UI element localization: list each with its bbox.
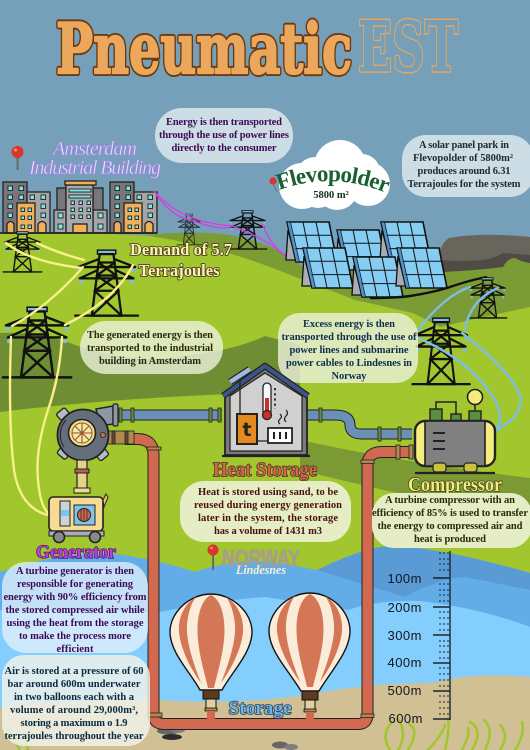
energy callout bubble: directly to the consumer (172, 143, 277, 154)
turbine (56, 404, 118, 493)
heading: Amsterdam Industrial Building: Industrial Building (28, 157, 161, 179)
heading: demand of 5.7 terrajoules: Terrajoules (138, 261, 220, 280)
power tower: right small (468, 278, 507, 318)
compressor callout bubble: A turbine compressor with an (385, 495, 515, 506)
title: Pneumatic (56, 9, 352, 90)
generator callout bubble: using the heat from the storage (6, 618, 144, 629)
power tower: right large (412, 318, 470, 384)
excess energy callout bubble: Excess energy is then (303, 319, 395, 330)
compressor callout bubble: heat is produced (414, 534, 486, 545)
depth scale: 500m (387, 683, 422, 698)
generator machine (49, 494, 108, 542)
pin: Amsterdam (12, 146, 24, 170)
yellow power lines (6, 243, 133, 515)
generated energy callout bubble: The generated energy is then (87, 330, 213, 341)
power tower: left near (3, 307, 71, 377)
solar park callout bubble: Flevopolder of 5800m² (413, 153, 513, 164)
excess energy callout bubble: transported through the use of (282, 332, 417, 343)
balloon right (269, 593, 350, 720)
depth scale (387, 551, 450, 726)
heading: demand of 5.7 terrajoules (130, 240, 232, 280)
solar panels back row (286, 222, 431, 270)
compressor callout bubble (372, 493, 530, 548)
depth scale: 600m (388, 711, 423, 726)
heading: storage: Storage (228, 698, 292, 719)
excess energy callout bubble: power lines and submarine (290, 345, 409, 356)
heat storage callout bubble: later in the system, the storage (198, 513, 338, 524)
heading: Amsterdam Industrial Building: Amsterdam (51, 138, 137, 160)
seaweed (8, 718, 523, 750)
generator callout bubble (2, 562, 148, 655)
cloud label: Flevopolder: Flevopolder (275, 167, 390, 192)
purple power lines (154, 191, 288, 258)
generator callout bubble: to make the process more (19, 631, 131, 642)
air storage callout bubble: in two balloons each with a (14, 692, 135, 703)
excess energy callout bubble: Norway (332, 371, 367, 382)
grey mountain (436, 235, 530, 285)
generator callout bubble: A turbine generator is then (16, 566, 134, 577)
building: left tower (3, 182, 50, 233)
title: Pneumatic (56, 9, 352, 90)
building: centre block (54, 181, 107, 233)
depth scale: 300m (387, 628, 422, 643)
air storage callout bubble (2, 655, 150, 746)
solar park callout bubble: A solar panel park in (419, 140, 509, 151)
solar park callout bubble: produces around 6.31 (418, 166, 510, 177)
depth scale: 400m (387, 655, 422, 670)
depth scale: 100m (387, 571, 422, 586)
generated energy callout bubble (80, 321, 223, 374)
air storage callout bubble: volume of around 29,000m³, (10, 705, 138, 716)
heading: Norway Lindesnes (222, 545, 300, 577)
heading: Norway Lindesnes: NORWAY (222, 545, 300, 571)
generator callout bubble: energy with 90% efficiency from (4, 592, 147, 603)
generated energy callout bubble: building in Amsterdam (99, 356, 201, 367)
heat storage house: t (242, 419, 252, 441)
excess energy callout bubble: power cables to Lindesnes in (286, 358, 412, 369)
building: right tower (110, 182, 157, 233)
heading: heat storage: Heat Storage (213, 460, 317, 481)
generator callout bubble: the stored compressed air while (6, 605, 145, 616)
title: EST (358, 7, 458, 88)
compressor callout bubble: the energy to compressed air and (378, 521, 523, 532)
stones (157, 727, 298, 750)
air storage callout bubble: Air is stored at a pressure of 60 (4, 666, 144, 677)
heading: generator: Generator (36, 543, 116, 563)
generated energy callout bubble: transported to the industrial (87, 343, 213, 354)
power tower: back right (228, 211, 267, 249)
sea water layers (0, 546, 530, 750)
blue power lines (417, 287, 521, 431)
solar panels front row (302, 248, 447, 297)
balloon left (170, 594, 252, 720)
energy callout bubble: Energy is then transported (166, 117, 282, 128)
cloud label: Flevopolder (275, 140, 390, 210)
heat storage callout bubble (180, 481, 351, 542)
heat storage callout bubble: Heat is stored using sand, to be (198, 487, 338, 498)
compressor machine (415, 390, 495, 473)
heat storage callout bubble: has a volume of 1431 m3 (214, 526, 322, 537)
power tower: left far (3, 232, 42, 272)
generator callout bubble: efficient (56, 644, 94, 655)
heat storage callout bubble: reused during energy generation (194, 500, 342, 511)
pin: Flevopolder (269, 177, 277, 192)
heading: Norway Lindesnes: Lindesnes (235, 562, 286, 577)
solar park callout bubble: Terrajoules for the system (408, 179, 521, 190)
depth scale: 200m (387, 600, 422, 615)
compressor callout bubble: efficiency of 85% is used to transfer (372, 508, 528, 519)
green hills (0, 232, 530, 600)
blue pipe system (118, 408, 412, 441)
red pipe system (108, 431, 413, 724)
title: EST (358, 7, 458, 88)
heading: Amsterdam Industrial Building (28, 138, 161, 179)
air storage callout bubble: bar around 600m underwater (8, 679, 141, 690)
heat storage house (222, 366, 310, 456)
heading: compressor: Compressor (408, 475, 502, 496)
air storage callout bubble: storing a maximum o 1.9 (20, 718, 128, 729)
heading: demand of 5.7 terrajoules: Demand of 5.7 (130, 240, 232, 259)
black cable (370, 277, 487, 298)
power tower: middle (75, 250, 138, 316)
power tower: small back left (177, 214, 201, 245)
energy callout bubble: through the use of power lines (159, 130, 289, 141)
pin: Norway (208, 544, 218, 570)
excess energy callout bubble (278, 313, 418, 383)
generator callout bubble: responsible for generating (17, 579, 134, 590)
energy callout bubble (155, 108, 293, 163)
cloud label: Flevopolder: 5800 m² (313, 190, 349, 201)
buildings (0, 181, 157, 233)
air storage callout bubble: terrajoules throughout the year (4, 731, 144, 742)
solar park callout bubble (402, 135, 530, 197)
seabed sand (0, 675, 530, 750)
